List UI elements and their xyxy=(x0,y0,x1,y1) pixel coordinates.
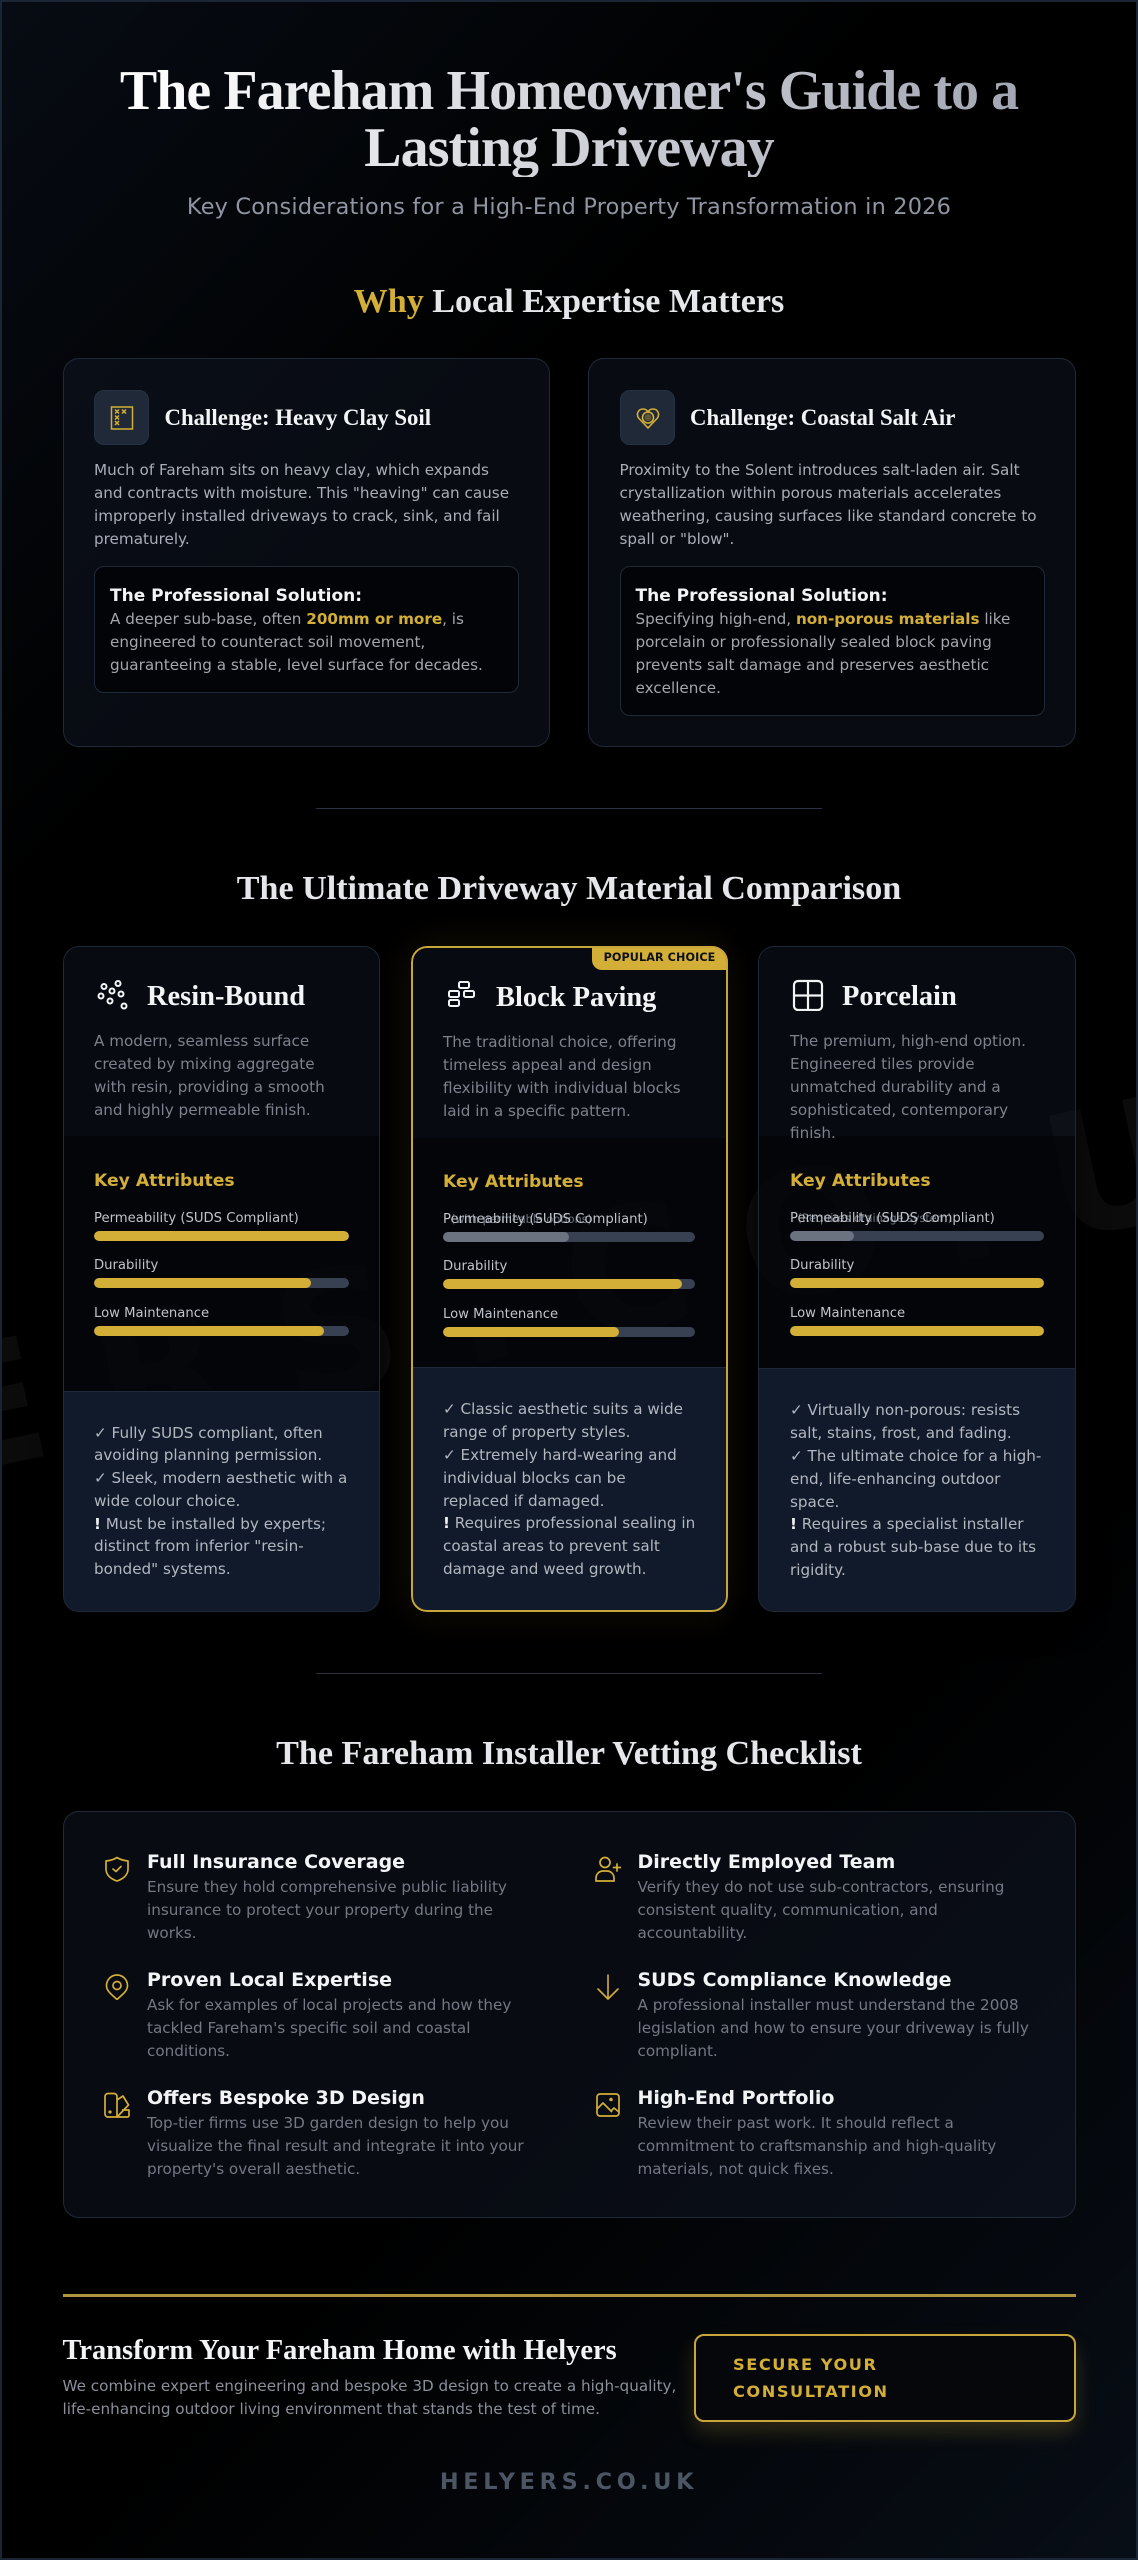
icon: salt heart xyxy=(620,390,674,445)
popular choice badge xyxy=(592,946,728,970)
pros and cons: avoiding planning permission. xyxy=(94,1446,322,1464)
item: portfolio xyxy=(596,2087,996,2178)
item: local expertise xyxy=(106,1969,511,2060)
material description: A modern, seamless surface xyxy=(94,1032,309,1050)
item text: Ensure they hold comprehensive public liability xyxy=(147,1878,507,1896)
solution text xyxy=(636,610,1010,697)
material description: with resin, providing a smooth xyxy=(94,1078,325,1096)
item heading: SUDS Compliance Knowledge xyxy=(638,1969,952,1991)
icon: arrow down xyxy=(597,1974,619,2000)
icon: clay grid xyxy=(94,390,149,445)
panel: resin-bound xyxy=(62,946,380,1612)
pros and cons: damage and weed growth. xyxy=(443,1560,647,1578)
item text: consistent quality, communication, and xyxy=(638,1901,938,1919)
panel: porcelain xyxy=(758,946,1076,1612)
solution heading: The Professional Solution: xyxy=(636,586,888,606)
icon: swatch book xyxy=(104,2092,130,2118)
item text xyxy=(147,1878,507,1942)
pros and cons: range of property styles. xyxy=(443,1423,630,1441)
solution text: porcelain or professionally sealed block paving xyxy=(636,633,992,651)
attribute: permeability: (Requires drainage system) xyxy=(798,1212,952,1225)
title: Lasting Driveway xyxy=(364,117,774,179)
heading: why local expertise: Why Local Expertise Matters xyxy=(354,283,784,320)
pros and cons: ✓ Sleek, modern aesthetic with a xyxy=(94,1469,347,1487)
material description: flexibility with individual blocks xyxy=(443,1079,681,1097)
item text: A professional installer must understand the 2008 xyxy=(638,1996,1019,2014)
material name: Block Paving xyxy=(496,982,656,1013)
pros and cons: salt, stains, frost, and fading. xyxy=(790,1424,1012,1442)
item heading: High-End Portfolio xyxy=(638,2087,834,2109)
pros and cons: ✓ Classic aesthetic suits a wide xyxy=(443,1400,683,1418)
solution text xyxy=(110,610,483,674)
heading: material comparison: The Ultimate Driveway Material Comparison xyxy=(237,870,901,906)
material description: timeless appeal and design xyxy=(443,1056,652,1074)
card text: Proximity to the Solent introduces salt-laden air. Salt xyxy=(620,461,1020,479)
solution text: A deeper sub-base, often 200mm or more, is xyxy=(110,610,464,628)
attribute: permeability: Permeability (SUDS Compliant) xyxy=(94,1210,299,1226)
item text xyxy=(147,1996,511,2060)
footer brand: HELYERS.CO.UK xyxy=(440,2469,698,2495)
card text: prematurely. xyxy=(94,530,190,548)
solution heading: The Professional Solution: xyxy=(110,586,362,606)
item text: Review their past work. It should reflect a xyxy=(638,2114,954,2132)
material description: laid in a specific pattern. xyxy=(443,1102,631,1120)
item text: works. xyxy=(147,1924,196,1942)
cta text xyxy=(62,2377,676,2418)
pros and cons xyxy=(790,1401,1041,1579)
cta text: We combine expert engineering and bespoke 3D design to create a high-quality, xyxy=(62,2377,676,2395)
material description: and highly permeable finish. xyxy=(94,1101,311,1119)
item text: property's overall aesthetic. xyxy=(147,2160,360,2178)
pros and cons: bonded" systems. xyxy=(94,1560,231,1578)
material description xyxy=(94,1032,325,1119)
key attributes heading: Key Attributes xyxy=(790,1170,931,1190)
item text: insurance to protect your property during the xyxy=(147,1901,493,1919)
pros and cons: ✓ Fully SUDS compliant, often xyxy=(94,1424,323,1442)
item text: commitment to craftsmanship and high-quality xyxy=(638,2137,996,2155)
material description: finish. xyxy=(790,1124,836,1142)
pros and cons: space. xyxy=(790,1493,839,1511)
icon: image xyxy=(596,2093,620,2117)
icon: user plus xyxy=(595,1856,621,1882)
title: The Fareham Homeowner's Guide to a xyxy=(120,60,1018,122)
card text xyxy=(94,461,509,548)
solution box xyxy=(94,566,519,693)
icon: paving blocks xyxy=(448,981,475,1007)
item text xyxy=(638,1996,1029,2060)
material description xyxy=(790,1032,1026,1142)
attribute: permeability: (with permeable options) xyxy=(451,1213,592,1226)
pros and cons: individual blocks can be xyxy=(443,1469,626,1487)
panel: heavy clay soil xyxy=(62,358,550,747)
item heading: Proven Local Expertise xyxy=(147,1969,392,1991)
pros and cons: ! Must be installed by experts; xyxy=(94,1515,326,1533)
card text: and contracts with moisture. This "heaving" can cause xyxy=(94,484,509,502)
attribute: low maintenance: Low Maintenance xyxy=(790,1306,905,1320)
item: employed team xyxy=(595,1851,1004,1942)
card text: crystallization within porous materials accelerates xyxy=(620,484,1001,502)
material description: Engineered tiles provide xyxy=(790,1055,975,1073)
card text: Much of Fareham sits on heavy clay, which expands xyxy=(94,461,489,479)
solution text: Specifying high-end, non-porous materials like xyxy=(636,610,1010,628)
item text: visualize the final result and integrate it into your xyxy=(147,2137,524,2155)
item text: materials, not quick fixes. xyxy=(638,2160,834,2178)
panel: checklist xyxy=(62,1811,1076,2218)
icon: shield xyxy=(105,1856,129,1882)
material description: sophisticated, contemporary xyxy=(790,1101,1008,1119)
solution text: prevents salt damage and preserves aesthetic xyxy=(636,656,989,674)
pros and cons xyxy=(443,1400,695,1578)
subtitle: Key Considerations for a High-End Property Transformation in 2026 xyxy=(187,194,951,220)
solution box xyxy=(620,566,1044,716)
item text: Top-tier firms use 3D garden design to help you xyxy=(147,2114,509,2132)
heading: vetting checklist: The Fareham Installer Vetting Checklist xyxy=(276,1734,862,1772)
item text xyxy=(638,1878,1004,1942)
button label: CONSULTATION xyxy=(733,2382,889,2400)
cta heading: Transform Your Fareham Home with Helyers xyxy=(62,2335,617,2366)
item: 3d design xyxy=(104,2087,524,2178)
material description: created by mixing aggregate xyxy=(94,1055,315,1073)
pros and cons: ✓ The ultimate choice for a high- xyxy=(790,1447,1041,1465)
panel: block paving: Permeability (SUDS Compliant) xyxy=(443,1212,648,1226)
material name: Porcelain xyxy=(842,981,957,1012)
item text: tackled Fareham's specific soil and coastal xyxy=(147,2019,470,2037)
item: suds compliance xyxy=(597,1969,1029,2060)
call to action xyxy=(62,2294,1084,2440)
item text: Ask for examples of local projects and how they xyxy=(147,1996,511,2014)
pros and cons: end, life-enhancing outdoor xyxy=(790,1470,1000,1488)
pros and cons: ✓ Extremely hard-wearing and xyxy=(443,1446,677,1464)
cta text: life-enhancing outdoor living environment that stands the test of time. xyxy=(62,2400,600,2418)
item text: accountability. xyxy=(638,1924,747,1942)
pros and cons: and a robust sub-base due to its xyxy=(790,1538,1036,1556)
material description: unmatched durability and a xyxy=(790,1078,1001,1096)
item: insurance xyxy=(105,1851,507,1942)
icon: resin aggregate xyxy=(98,980,128,1010)
attribute: durability: Durability xyxy=(94,1258,158,1273)
item text: legislation and how to ensure your driveway is fully xyxy=(638,2019,1029,2037)
solution text: guaranteeing a stable, level surface for decades. xyxy=(110,656,483,674)
panel: coastal salt air xyxy=(588,358,1076,747)
cta button xyxy=(694,2334,1076,2422)
item text: conditions. xyxy=(147,2042,230,2060)
pros and cons: ! Requires professional sealing in xyxy=(443,1514,695,1532)
card title: Challenge: Coastal Salt Air xyxy=(690,405,955,430)
pros and cons: distinct from inferior "resin- xyxy=(94,1537,304,1555)
pros and cons xyxy=(94,1424,347,1578)
attribute: low maintenance: Low Maintenance xyxy=(443,1306,558,1322)
pros and cons: replaced if damaged. xyxy=(443,1492,604,1510)
attribute: durability: Durability xyxy=(790,1258,854,1273)
item heading: Full Insurance Coverage xyxy=(147,1851,405,1873)
pros and cons: coastal areas to prevent salt xyxy=(443,1537,660,1555)
card title: Challenge: Heavy Clay Soil xyxy=(164,405,431,430)
icon: map pin xyxy=(106,1974,128,2000)
item text xyxy=(638,2114,996,2178)
button label xyxy=(733,2355,889,2400)
material description: The premium, high-end option. xyxy=(790,1032,1026,1050)
attribute: low maintenance: Low Maintenance xyxy=(94,1306,209,1320)
panel: porcelain: Permeability (SUDS Compliant) xyxy=(790,1210,995,1226)
button label: SECURE YOUR xyxy=(733,2355,877,2374)
item text: Verify they do not use sub-contractors, ensuring xyxy=(638,1878,1004,1896)
attribute: durability: Durability xyxy=(443,1259,507,1274)
material name: Resin-Bound xyxy=(147,981,305,1012)
card text: weathering, causing surfaces like standard concrete to xyxy=(620,507,1037,525)
item heading: Offers Bespoke 3D Design xyxy=(147,2087,425,2109)
material description xyxy=(442,1033,681,1120)
pros and cons: wide colour choice. xyxy=(94,1492,240,1510)
card text xyxy=(620,461,1037,548)
pros and cons: rigidity. xyxy=(790,1561,846,1579)
solution text: engineered to counteract soil movement, xyxy=(110,633,425,651)
item heading: Directly Employed Team xyxy=(638,1851,895,1873)
key attributes heading: Key Attributes xyxy=(443,1172,584,1192)
pros and cons: ✓ Virtually non-porous: resists xyxy=(790,1401,1020,1419)
popular choice badge: POPULAR CHOICE xyxy=(604,951,715,964)
item text: compliant. xyxy=(638,2042,718,2060)
icon: tile grid xyxy=(792,980,824,1011)
key attributes heading: Key Attributes xyxy=(94,1170,235,1190)
material description: The traditional choice, offering xyxy=(443,1033,677,1051)
solution text: excellence. xyxy=(636,679,721,697)
panel: block paving xyxy=(411,946,728,1612)
card text: spall or "blow". xyxy=(620,530,734,548)
title xyxy=(0,63,1138,177)
pros and cons: ! Requires a specialist installer xyxy=(790,1515,1024,1533)
item text xyxy=(146,2114,524,2178)
card text: improperly installed driveways to crack, sink, and fail xyxy=(94,507,500,525)
